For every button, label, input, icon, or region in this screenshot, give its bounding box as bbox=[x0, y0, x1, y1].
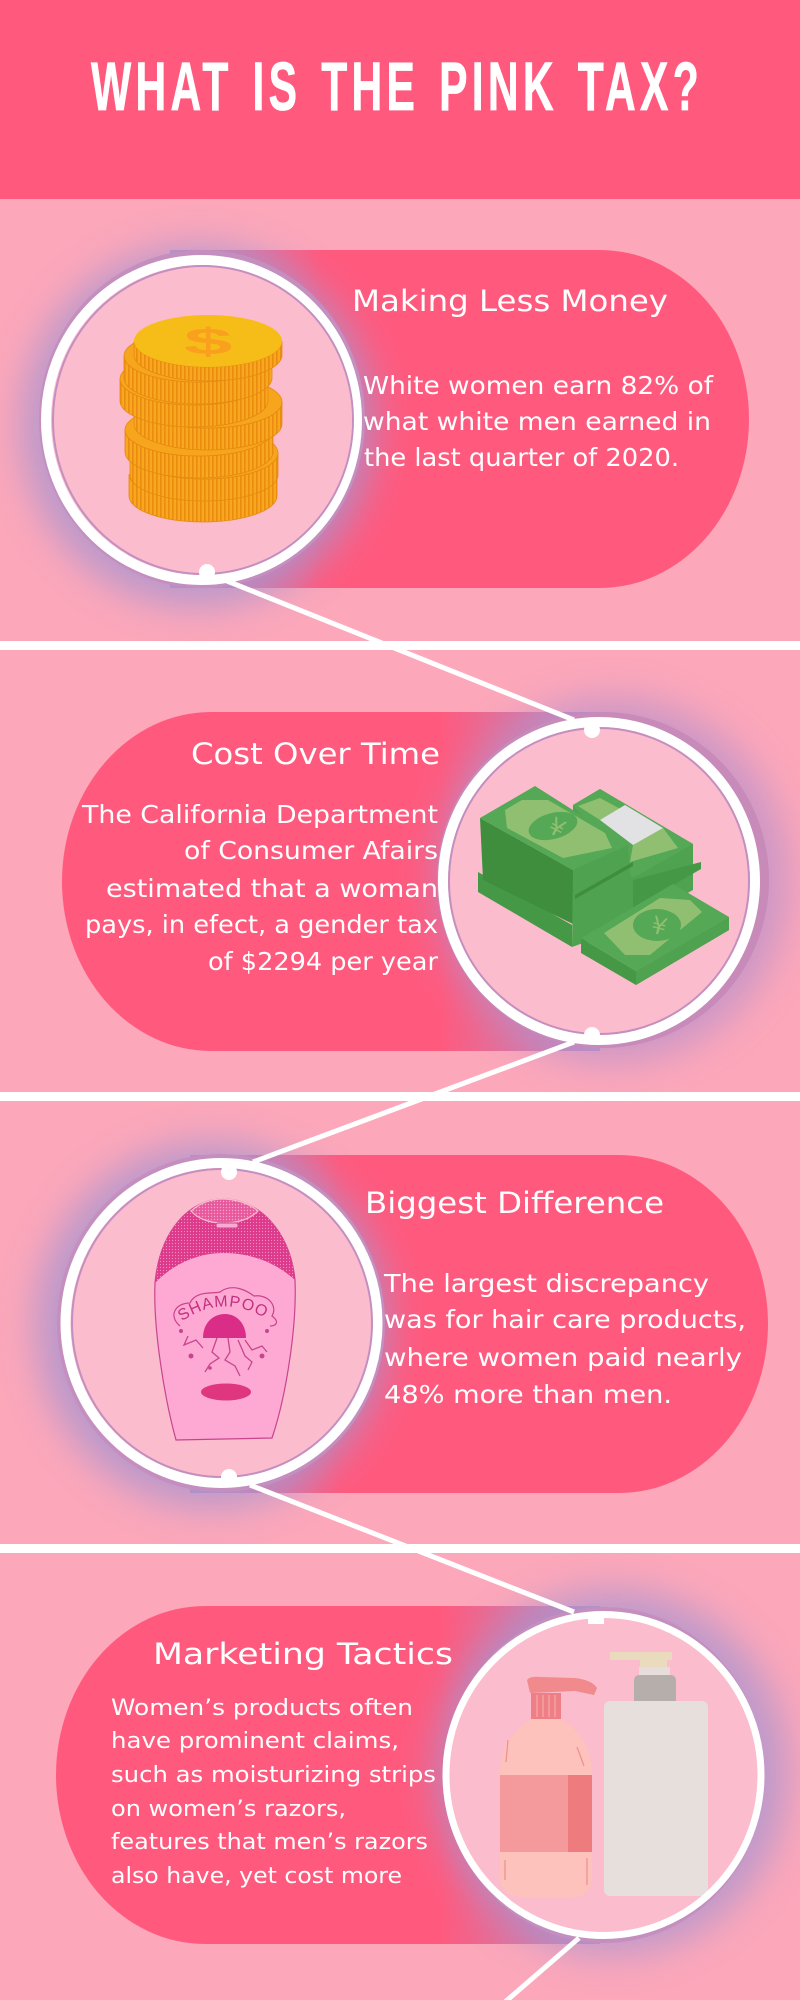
body: what white men earned in bbox=[363, 407, 711, 436]
body bbox=[111, 1695, 436, 1889]
body: such as moisturizing strips bbox=[111, 1762, 436, 1788]
body bbox=[81, 800, 439, 976]
dollar sign: $ bbox=[184, 321, 232, 362]
body: on women’s razors, bbox=[111, 1796, 346, 1822]
connector line 1 bbox=[227, 581, 574, 720]
jellyfish motif bbox=[203, 1314, 246, 1338]
connector dot bbox=[584, 722, 600, 738]
icon: stacks of banknotes: ¥ bbox=[648, 911, 670, 942]
panel: biggest difference pill bbox=[190, 1155, 768, 1493]
body: have prominent claims, bbox=[111, 1728, 399, 1754]
heading: Biggest Difference bbox=[365, 1186, 664, 1220]
cloud outline bbox=[174, 1288, 276, 1326]
circle 1: coins bbox=[22, 246, 374, 606]
header band bbox=[0, 0, 800, 199]
circle 2: money bbox=[436, 698, 788, 1062]
body: of $2294 per year bbox=[208, 947, 439, 976]
body: The California Department bbox=[81, 800, 438, 829]
icon: stacks of banknotes bbox=[478, 786, 729, 985]
connector line 4 bbox=[505, 1938, 579, 2000]
body: 48% more than men. bbox=[384, 1380, 672, 1409]
connector dot bbox=[584, 1027, 600, 1043]
shampoo label: SHAMPOO bbox=[178, 1295, 267, 1320]
icon: pump bottles bbox=[500, 1652, 708, 1897]
connector dot bbox=[221, 1469, 237, 1485]
heading: Making Less Money bbox=[352, 284, 668, 318]
panel: marketing tactics pill bbox=[56, 1606, 600, 1944]
heading: Marketing Tactics bbox=[153, 1637, 453, 1671]
connector dot bbox=[199, 564, 215, 580]
body: pays, in efect, a gender tax bbox=[85, 910, 438, 939]
panel: cost over time pill bbox=[62, 712, 600, 1051]
body bbox=[363, 371, 714, 472]
text: biggest difference bbox=[365, 1186, 746, 1409]
text: cost over time bbox=[81, 737, 440, 976]
circle 4: pump bottles bbox=[436, 1590, 788, 1954]
connector line 2 bbox=[253, 1042, 574, 1162]
connector line 3 bbox=[250, 1485, 574, 1612]
body: The largest discrepancy bbox=[383, 1269, 709, 1298]
panel: making less money pill bbox=[170, 250, 749, 588]
icon: shampoo bottle bbox=[154, 1198, 296, 1441]
body: features that men’s razors bbox=[111, 1829, 428, 1855]
body: of Consumer Afairs bbox=[184, 836, 438, 865]
body: estimated that a woman bbox=[106, 874, 438, 903]
text: marketing tactics bbox=[111, 1637, 453, 1889]
icon: stacks of banknotes: ¥ bbox=[543, 812, 570, 844]
body: also have, yet cost more bbox=[111, 1863, 402, 1889]
body: the last quarter of 2020. bbox=[364, 443, 679, 472]
body: where women paid nearly bbox=[384, 1343, 742, 1372]
body: Women’s products often bbox=[111, 1695, 413, 1721]
body: was for hair care products, bbox=[384, 1305, 746, 1334]
connector dot bbox=[221, 1164, 237, 1180]
heading: Cost Over Time bbox=[191, 737, 440, 771]
body bbox=[383, 1269, 746, 1409]
body: White women earn 82% of bbox=[363, 371, 714, 400]
oval badge bbox=[201, 1384, 251, 1400]
circle 3: shampoo bbox=[15, 1122, 409, 1528]
connector tab bbox=[588, 1618, 604, 1624]
text: making less money bbox=[352, 284, 714, 472]
icon: coin stack bbox=[120, 315, 282, 522]
